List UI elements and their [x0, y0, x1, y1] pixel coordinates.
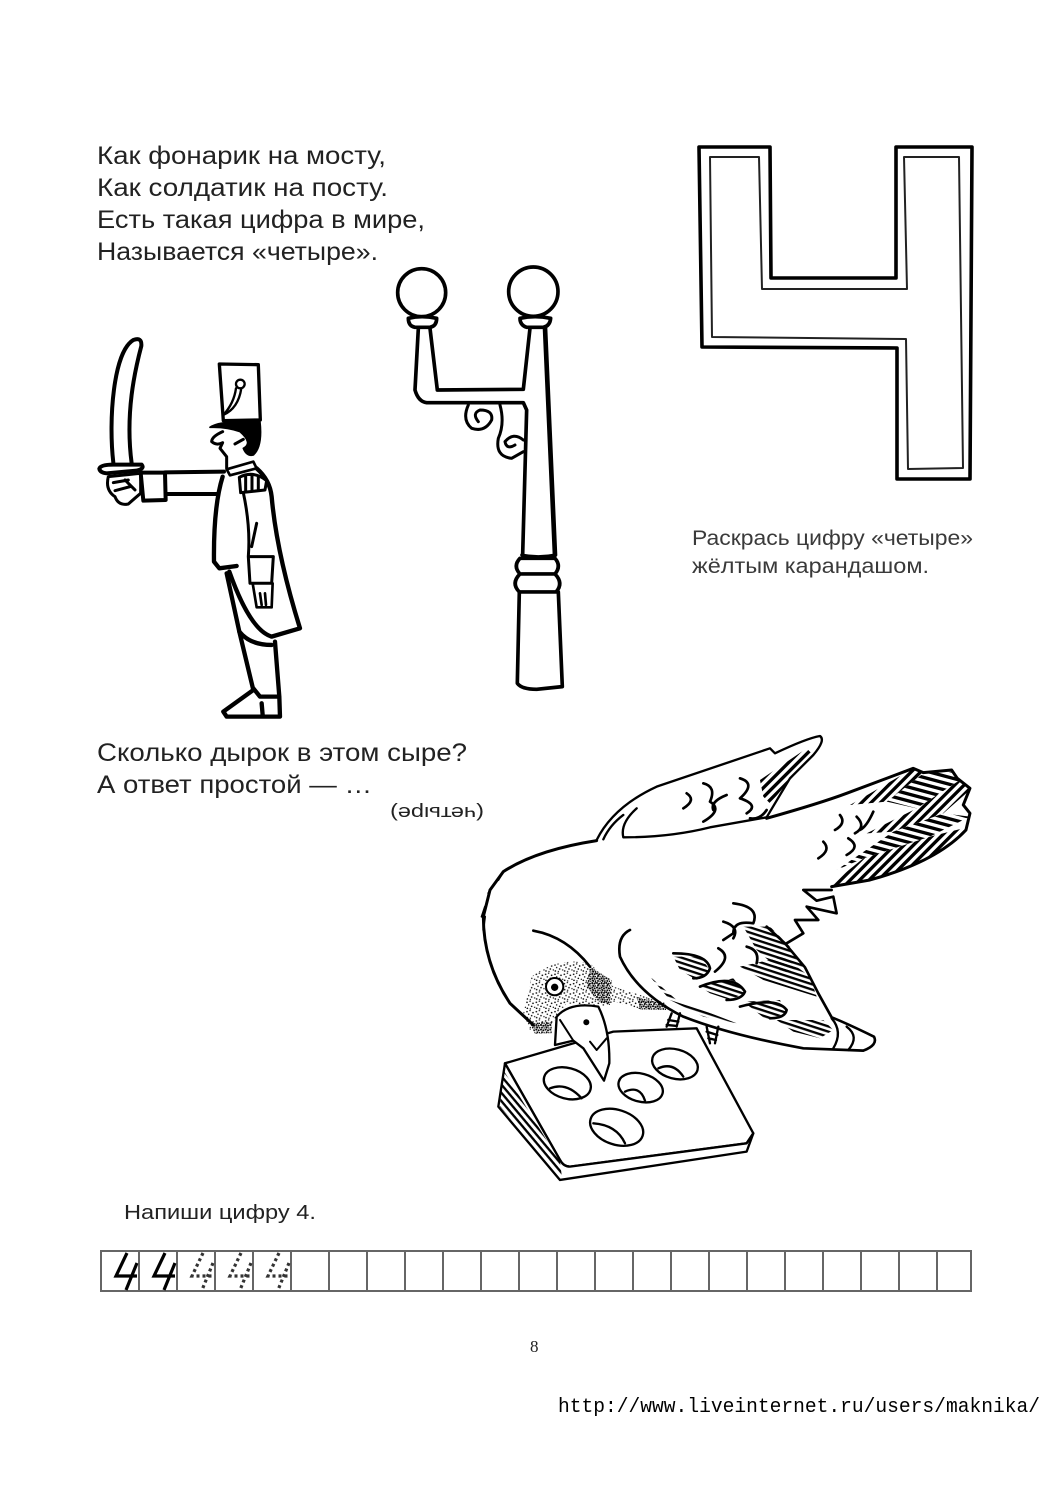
writing prompt: Напиши цифру 4.: [124, 1201, 316, 1224]
right globe cap: [520, 317, 551, 327]
poem text: Как солдатик на посту.: [97, 174, 388, 202]
cuff: [141, 473, 166, 501]
poem text: Как фонарик на мосту,: [97, 142, 386, 170]
face: [212, 432, 243, 468]
cheese side: [498, 1063, 753, 1180]
crow pecking cheese: [482, 736, 970, 1180]
upside-down answer: (четыре): [390, 803, 484, 823]
tail scallop marks: [818, 812, 873, 858]
plume: [223, 380, 245, 415]
cheese block: [505, 1028, 753, 1167]
head stippling: [523, 962, 670, 1034]
legs: [667, 1013, 718, 1043]
tail feather hatching: [828, 768, 970, 887]
solid digit 2: [154, 1253, 175, 1290]
colouring instruction: [692, 526, 973, 578]
solid digit 1: [116, 1253, 137, 1290]
digit outer outline: [699, 147, 972, 479]
writing practice grid: [101, 1251, 971, 1291]
post base: [517, 592, 562, 689]
lamp arm: [415, 328, 530, 555]
sabre blade: [112, 339, 141, 463]
cheese side hatching: [500, 1070, 562, 1175]
beak: [555, 1005, 609, 1081]
pupil: [551, 984, 558, 991]
upper wing: [597, 736, 822, 840]
lower wing hatching: [650, 927, 833, 1038]
legs and boot: [223, 632, 280, 717]
lamp post right edge: [545, 327, 555, 555]
wing tip scallops: [832, 1018, 854, 1050]
poem text: [97, 142, 425, 266]
riddle text: Сколько дырок в этом сыре?: [97, 739, 467, 767]
source url: http://www.liveinternet.ru/users/maknika/: [558, 1396, 1040, 1419]
sabre guard: [99, 465, 143, 473]
rough neck edge: [482, 872, 503, 930]
sleeve: [243, 493, 273, 583]
page number: 8: [530, 1337, 538, 1356]
left globe: [398, 269, 446, 317]
large outlined digit 4: [699, 147, 972, 479]
lower wing: [619, 927, 875, 1051]
epaulette: [239, 474, 267, 493]
poem text: Называется «четыре».: [97, 238, 378, 266]
feather zigzag: [787, 890, 837, 943]
dotted digits: [192, 1253, 289, 1290]
cheese holes: [540, 1044, 701, 1152]
back and chest: [483, 841, 597, 1025]
collar: [227, 462, 257, 475]
scrolls: [466, 405, 523, 458]
digit inner outline: [710, 157, 963, 469]
shako hat: [219, 364, 260, 421]
wing scallop marks: [673, 903, 787, 1018]
gloved hand: [253, 583, 273, 607]
coat tail and leg front: [227, 573, 272, 645]
colouring instruction: Раскрась цифру «четыре»: [692, 526, 973, 550]
colouring instruction: жёлтым карандашом.: [692, 554, 929, 578]
sample digits: [116, 1253, 289, 1290]
eye: [546, 978, 563, 995]
beak details: [560, 1020, 607, 1050]
soldier with sabre: [99, 339, 300, 717]
fist: [107, 473, 141, 504]
right globe: [509, 267, 558, 316]
wing feather marks: [683, 778, 767, 822]
street lamp: [398, 267, 562, 689]
outstretched arm: [165, 472, 224, 494]
visor and hair: [210, 422, 261, 455]
coat: [214, 468, 300, 637]
wing tip hatching: [760, 748, 813, 803]
left globe cap: [408, 317, 437, 327]
head cap line: [533, 931, 590, 967]
post rings: [515, 558, 560, 592]
tail edge: [767, 768, 970, 887]
poem text: Есть такая цифра в мире,: [97, 206, 425, 234]
riddle text: А ответ простой — …: [97, 771, 372, 799]
riddle text: [97, 739, 467, 799]
